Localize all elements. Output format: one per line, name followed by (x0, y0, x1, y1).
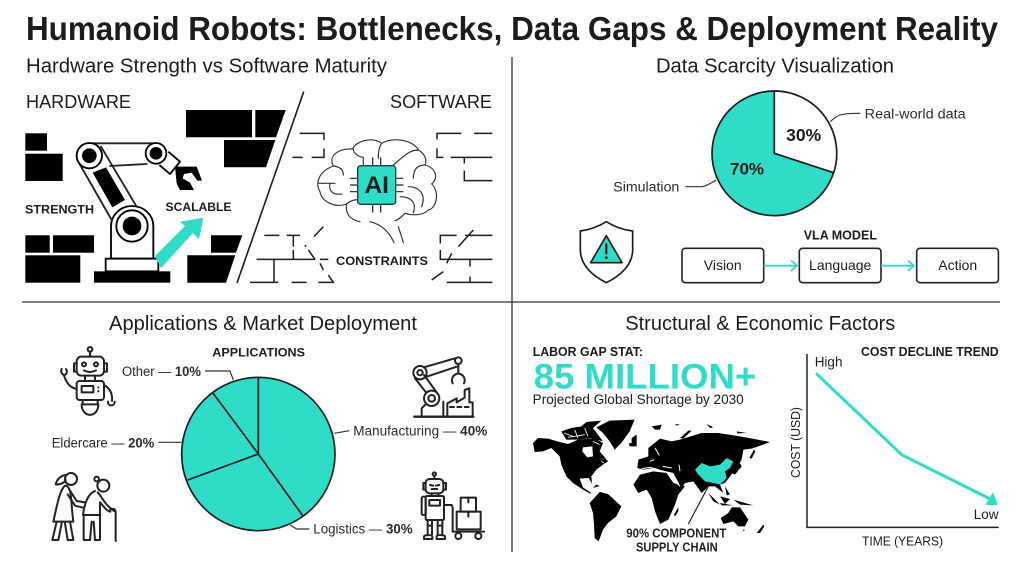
icon: AI brain (318, 140, 436, 243)
label: simulation: Simulation (613, 180, 679, 194)
big number: 85 million+: 85 MILLION+ (534, 357, 756, 396)
heading: structural and economic factors: Structural & Economic Factors (625, 313, 895, 335)
label: software: SOFTWARE (390, 91, 492, 112)
panel: hardware vs software (25, 56, 492, 283)
label: logistics 30%: Logistics — 30% (313, 522, 413, 537)
dashed software bricks (250, 133, 492, 282)
label: hardware: HARDWARE (26, 91, 131, 112)
label: labor gap stat: LABOR GAP STAT: (533, 345, 643, 359)
caption: projected shortage: Projected Global Shortage by 2030 (533, 392, 744, 407)
label: other 10%: Other — 10% (122, 364, 201, 379)
line chart: cost decline (807, 354, 999, 527)
solid hardware bricks (25, 110, 286, 283)
box: language (799, 248, 881, 283)
AI chip label: AI (364, 172, 389, 199)
panel: structural and economic factors (533, 313, 999, 555)
icon: caregiver and elder (52, 473, 116, 541)
label: scalable: SCALABLE (166, 200, 232, 214)
diagonal divider (237, 92, 304, 283)
arrow: scalable growth (155, 218, 203, 268)
pie chart: simulation vs real-world (685, 91, 860, 216)
flow diagram: vision language action (682, 248, 998, 283)
box: vision: Vision (704, 257, 742, 273)
label: strength: STRENGTH (25, 202, 94, 216)
box: language: Language (809, 257, 872, 273)
panel: data scarcity (580, 56, 998, 283)
label: manufacturing 40%: Manufacturing — 40% (353, 424, 487, 439)
chart label: low: Low (974, 507, 999, 522)
americas and greenland (533, 420, 635, 541)
icon: waving robot (61, 347, 115, 415)
icon: warning shield (580, 222, 633, 283)
icon: manufacturing robot and factory (413, 357, 473, 417)
axis label: time (years): TIME (YEARS) (862, 534, 943, 549)
pie chart: application shares (158, 371, 349, 531)
label: 90% component supply chain: 90% COMPONENT (626, 527, 727, 541)
label: constraints: CONSTRAINTS (336, 254, 428, 268)
box: vision (682, 248, 764, 283)
arrow: language to action (881, 260, 914, 271)
icon: robot arm (77, 143, 202, 283)
heading: applications and market deployment: Applications & Market Deployment (109, 313, 417, 335)
pie value: 70%: 70% (730, 160, 764, 178)
label: 90% component supply chain (626, 527, 727, 555)
pie heading: applications: APPLICATIONS (212, 346, 305, 360)
box: action: Action (938, 257, 977, 273)
axis label: cost (USD): COST (USD) (788, 407, 803, 478)
heading: data scarcity visualization: Data Scarcity Visualization (656, 56, 894, 78)
eurasia africa and oceania (632, 424, 770, 533)
chart label: high: High (815, 355, 842, 370)
pie value: 30%: 30% (786, 125, 822, 145)
heading: VLA model: VLA MODEL (804, 228, 877, 242)
icon: logistics robot with cart (422, 472, 484, 539)
world map with China highlighted (533, 420, 770, 541)
label: 90% component supply chain: SUPPLY CHAIN (636, 541, 718, 555)
panel: applications and market deployment (52, 313, 487, 541)
chart heading: cost decline trend: COST DECLINE TREND (861, 345, 999, 359)
arrow: vision to language (764, 260, 797, 271)
label: real-world data: Real-world data (865, 106, 966, 121)
box: action (917, 248, 998, 283)
heading: hardware strength vs software maturity: Hardware Strength vs Software Maturity (26, 56, 387, 78)
label: eldercare 20%: Eldercare — 20% (52, 435, 154, 450)
